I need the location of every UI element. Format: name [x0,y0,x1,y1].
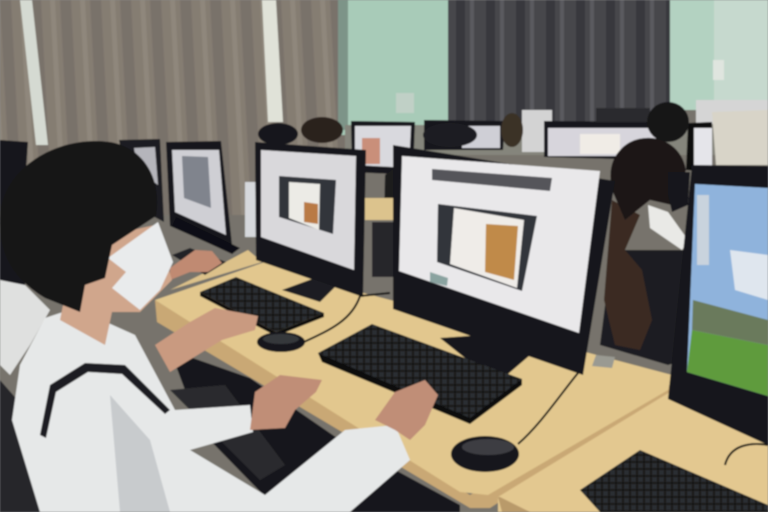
hair [0,141,157,312]
face mask [108,222,173,310]
student with long hair on the right [600,138,690,365]
small monitor, far left [119,139,164,222]
back row monitors [351,100,768,175]
monitor: right foreground [668,165,768,445]
hands [250,375,322,430]
mouse: large center [304,293,578,472]
chair [0,380,95,512]
monitor: third row left [166,141,240,254]
suspender [40,363,170,438]
main desk [155,250,672,508]
face and neck [60,225,172,345]
monitor: large center [393,145,615,375]
keyboard and hand, third row [170,248,226,280]
mouse: second row [257,332,305,352]
keyboard: right foreground [580,444,768,512]
back row students [245,102,689,277]
keyboard: large center [318,324,522,424]
shirt [12,308,410,512]
far arm [155,308,258,372]
keyboard: second row [200,277,324,336]
monitor: second row center [255,142,366,302]
student in the foreground [0,140,460,512]
neighbour's shirt at the left edge [0,280,50,375]
front right desk [498,392,768,512]
